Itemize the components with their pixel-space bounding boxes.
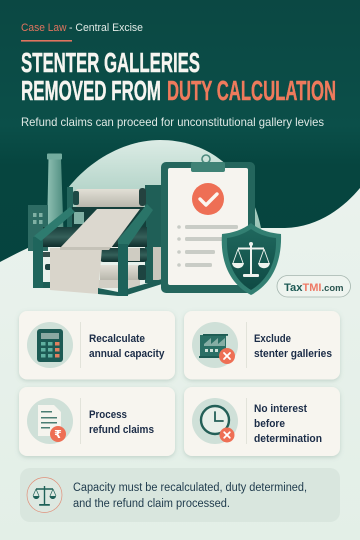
icon: orange check bbox=[192, 183, 224, 215]
illustration: stenter machine bbox=[33, 185, 162, 296]
card: process refund claims: Process bbox=[89, 409, 127, 421]
category label: Case Law bbox=[21, 22, 67, 34]
icon: calculator bbox=[37, 329, 63, 362]
icon: factory chimney and building bbox=[28, 154, 64, 251]
panel: conclusion: Capacity must be recalculated, duty determined, bbox=[73, 482, 307, 494]
title bbox=[21, 47, 336, 106]
category label: - Central Excise bbox=[69, 22, 143, 34]
title: STENTER GALLERIES bbox=[21, 47, 200, 78]
icon: clock with cross bbox=[201, 406, 234, 442]
card: recalculate annual capacity bbox=[19, 311, 175, 380]
card: recalculate annual capacity: Recalculate bbox=[89, 333, 145, 345]
icon: factory with cross bbox=[199, 334, 235, 364]
icon: scales bbox=[27, 478, 62, 512]
card: no interest before determination: determination bbox=[254, 433, 322, 445]
card: recalculate annual capacity: annual capacity bbox=[89, 348, 164, 360]
icon: refund document bbox=[38, 405, 66, 442]
card: process refund claims bbox=[19, 387, 175, 456]
logo: TaxTMI.com: Tax bbox=[284, 282, 303, 294]
mint hill behind illustration bbox=[68, 140, 262, 245]
icon: refund document: ₹ bbox=[54, 428, 62, 441]
logo: TaxTMI.com: TMI bbox=[302, 282, 322, 294]
card: no interest before determination: No interest bbox=[254, 403, 307, 415]
panel: conclusion bbox=[20, 468, 340, 522]
card: process refund claims: refund claims bbox=[89, 424, 154, 436]
logo: TaxTMI.com bbox=[277, 276, 350, 297]
card: no interest before determination bbox=[184, 387, 340, 456]
category label bbox=[21, 22, 143, 42]
panel: conclusion: and the refund claim processed. bbox=[73, 498, 230, 510]
icon: justice shield bbox=[222, 223, 281, 295]
light lower background bbox=[0, 188, 360, 540]
logo: TaxTMI.com: .com bbox=[322, 283, 344, 293]
card: exclude stenter galleries: Exclude bbox=[254, 333, 291, 345]
illustration: clipboard bbox=[161, 155, 255, 293]
title: REMOVED FROM bbox=[21, 75, 161, 106]
card: exclude stenter galleries: stenter galleries bbox=[254, 348, 332, 360]
dark header background bbox=[0, 0, 360, 300]
card: no interest before determination: before bbox=[254, 418, 285, 430]
card: exclude stenter galleries bbox=[184, 311, 340, 380]
subtitle: Refund claims can proceed for unconstitutional gallery levies bbox=[21, 115, 324, 129]
